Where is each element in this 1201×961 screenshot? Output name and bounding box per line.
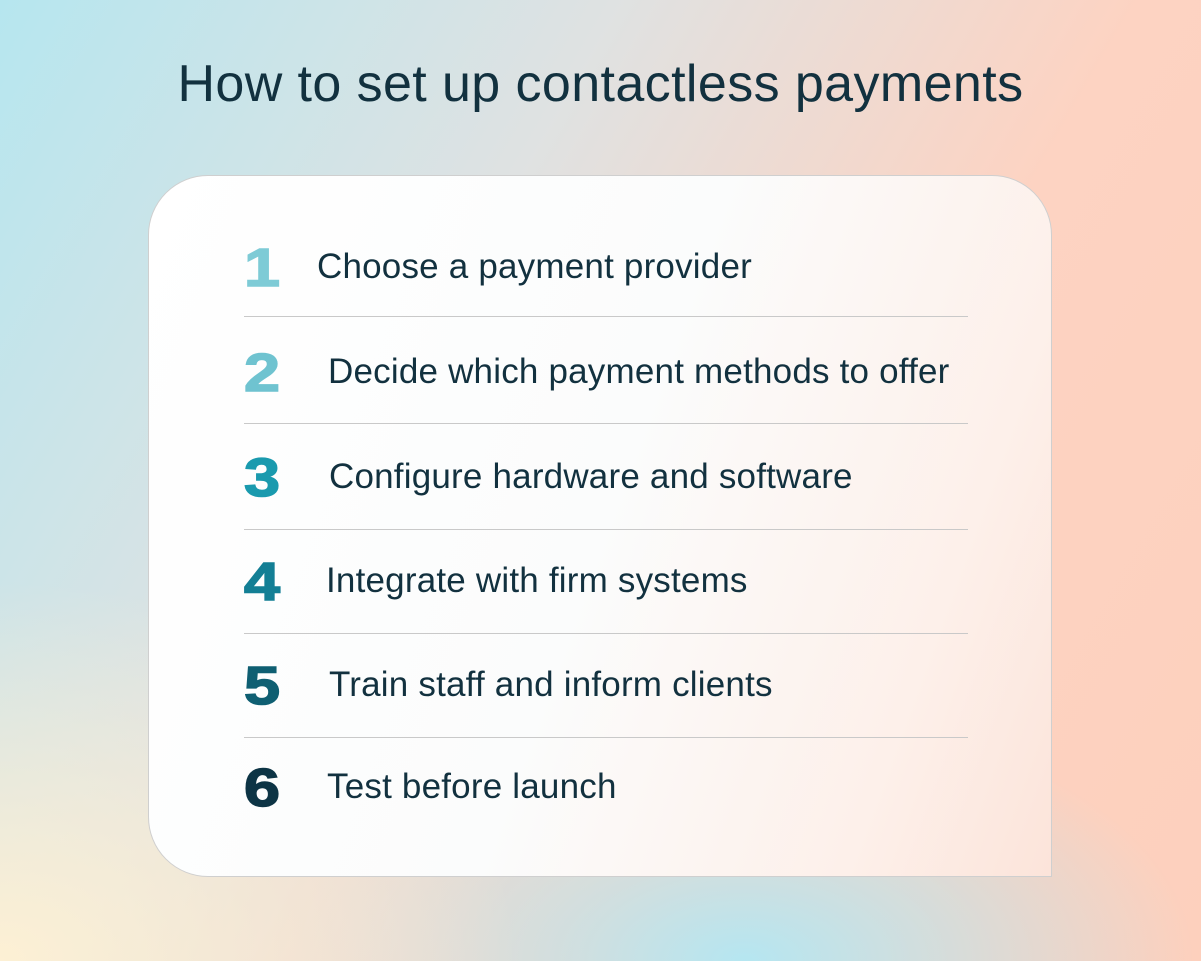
step 4: 4: [244, 552, 280, 612]
step 5: [244, 656, 773, 716]
step 5: 5: [244, 656, 280, 716]
step 4: Integrate with firm systems: [326, 561, 748, 600]
step 2: 2: [244, 343, 280, 403]
step 1: [244, 238, 752, 298]
step 1: 1: [244, 238, 280, 298]
step 2: [244, 343, 950, 403]
step 6: Test before launch: [327, 767, 617, 806]
title: How to set up contactless payments: [177, 55, 1024, 113]
step 6: [244, 758, 617, 818]
step 3: 3: [244, 448, 280, 508]
step 4: [244, 552, 748, 612]
step 3: [244, 448, 853, 508]
step 2: Decide which payment methods to offer: [328, 352, 950, 391]
step 5: Train staff and inform clients: [329, 665, 773, 704]
step 6: 6: [244, 758, 280, 818]
step 1: Choose a payment provider: [317, 247, 752, 286]
step 3: Configure hardware and software: [329, 457, 853, 496]
panel: steps card: [148, 175, 1052, 877]
